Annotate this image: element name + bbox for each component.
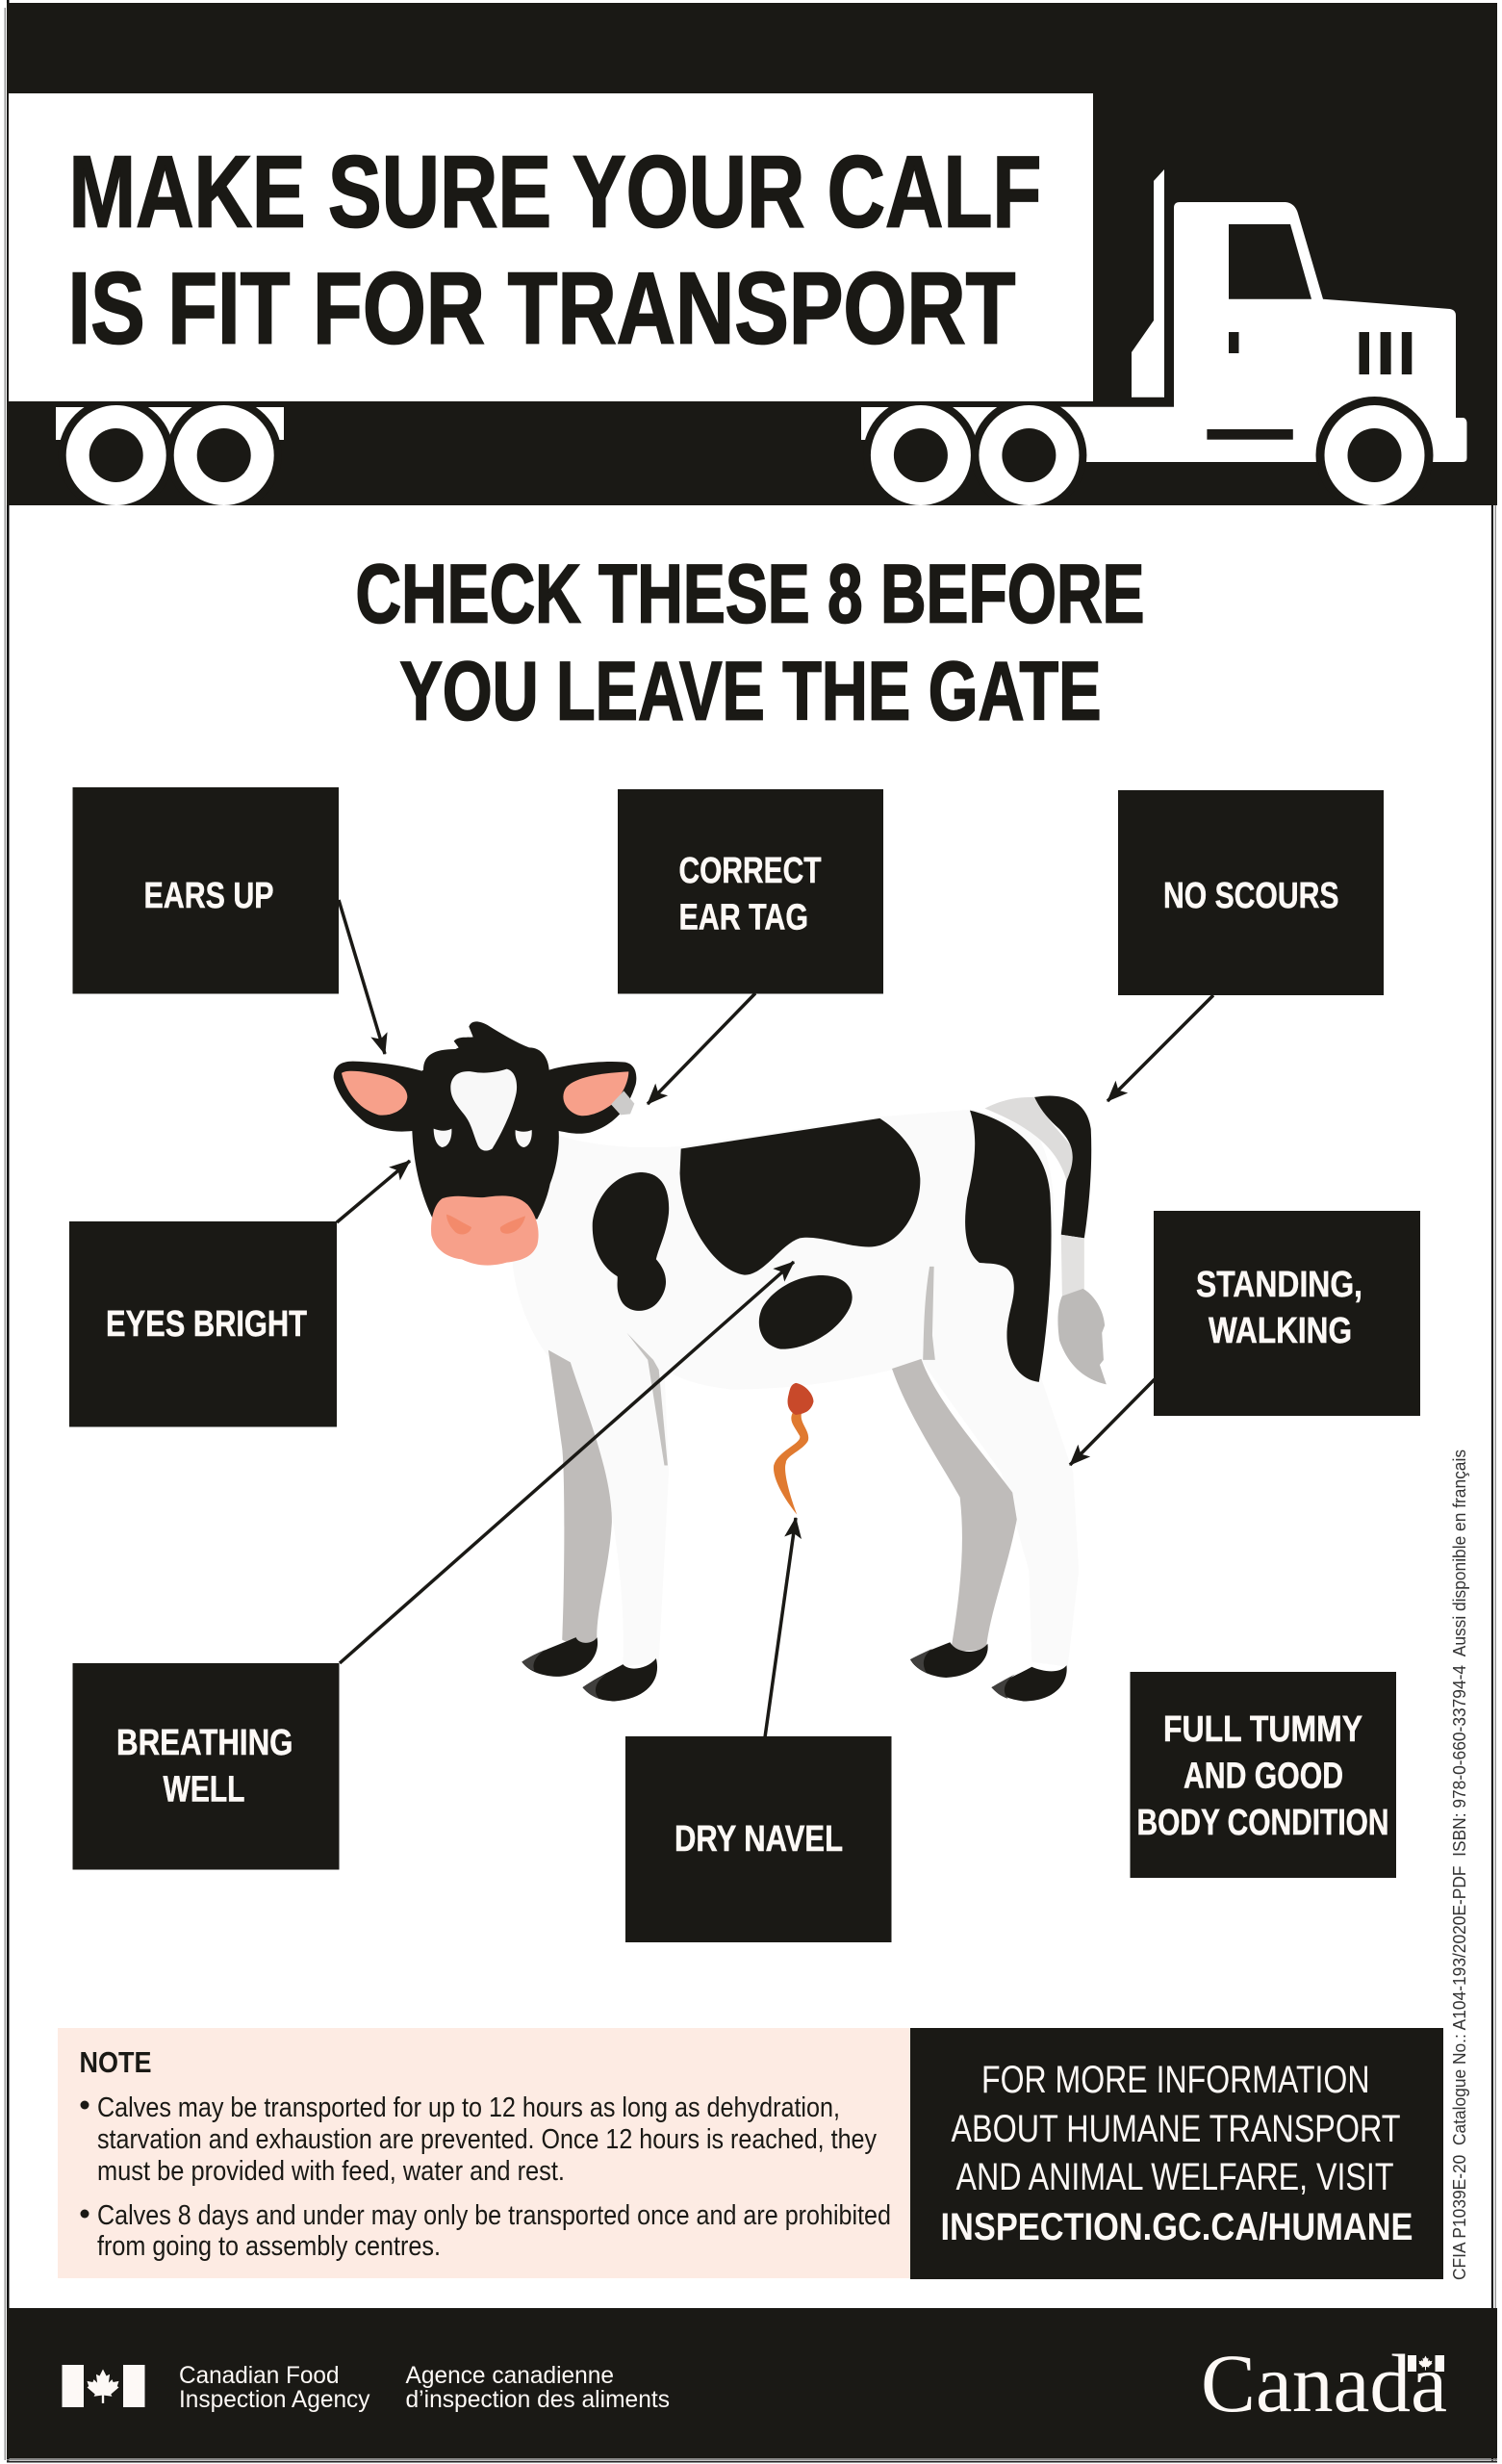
calf body (513, 1095, 1107, 1701)
panel: more information: FOR MORE INFORMATION (981, 2059, 1370, 2101)
arrow: breathing well (340, 1262, 794, 1663)
arrow: standing walking (1070, 1379, 1155, 1465)
panel: more information (910, 2028, 1443, 2279)
panel: more information: AND ANIMAL WELFARE, VISIT (956, 2156, 1393, 2198)
note bullet one (81, 2092, 877, 2187)
footer band (7, 2308, 1497, 2462)
note bullet one: must be provided with feed, water and rest. (97, 2156, 565, 2187)
icon: canadian flag (62, 2365, 144, 2407)
box: standing walking: STANDING, (1196, 1265, 1362, 1305)
catalogue side text: CFIA P1039E-20 Catalogue No.: A104-193/2020E-PDF ISBN: 978-0-660-33794-4 Aussi disponible en français (1450, 1450, 1469, 2280)
agency name english: Inspection Agency (179, 2386, 370, 2413)
arrow: dry navel (765, 1518, 796, 1737)
box: ears up: EARS UP (144, 876, 273, 916)
box: eyes bright (69, 1221, 337, 1426)
truck trailer panel (9, 93, 1093, 401)
box: full tummy: AND GOOD (1184, 1756, 1343, 1796)
arrow: ears up (339, 900, 385, 1054)
truck wheels (861, 397, 1434, 514)
agency name english (179, 2362, 370, 2413)
box: breathing well: BREATHING (116, 1723, 293, 1763)
agency name french: Agence canadienne (406, 2362, 614, 2389)
subheading: YOU LEAVE THE GATE (400, 645, 1101, 737)
agency name french: d’inspection des aliments (406, 2386, 670, 2413)
calf illustration (334, 1021, 1107, 1701)
box: full tummy: FULL TUMMY (1163, 1709, 1362, 1750)
box: standing walking: WALKING (1209, 1311, 1352, 1351)
agency name english: Canadian Food (179, 2362, 339, 2389)
box: correct ear tag: EAR TAG (679, 897, 808, 937)
agency name french (406, 2362, 670, 2413)
box: full tummy (1130, 1672, 1396, 1878)
box: full tummy: BODY CONDITION (1137, 1803, 1389, 1843)
box: dry navel: DRY NAVEL (675, 1819, 843, 1860)
box: standing walking (1154, 1211, 1420, 1416)
arrow: eyes bright (337, 1161, 410, 1222)
panel: more information: INSPECTION.GC.CA/HUMANE (941, 2206, 1413, 2248)
note heading: NOTE (79, 2045, 152, 2079)
calf head (334, 1021, 636, 1266)
note bullet two: Calves 8 days and under may only be transported once and are prohibited (97, 2200, 891, 2231)
subheading: CHECK THESE 8 BEFORE (356, 549, 1145, 641)
box: eyes bright: EYES BRIGHT (106, 1304, 307, 1345)
note bullet one: starvation and exhaustion are prevented. Once 12 hours is reached, they (97, 2124, 877, 2155)
box: dry navel (625, 1736, 891, 1942)
trailer wheels (56, 405, 284, 505)
box: no scours (1118, 790, 1384, 995)
title (67, 135, 1041, 366)
hooves (522, 1637, 598, 1677)
box: breathing well (73, 1663, 339, 1869)
title: IS FIT FOR TRANSPORT (67, 252, 1016, 366)
box: ears up (73, 787, 339, 993)
truck cab (1049, 169, 1466, 462)
box: correct ear tag: CORRECT (679, 851, 822, 891)
box: correct ear tag (618, 789, 883, 993)
note bullet two: from going to assembly centres. (97, 2231, 441, 2262)
panel: note (58, 2028, 910, 2278)
box: no scours: NO SCOURS (1163, 876, 1339, 916)
arrow: correct ear tag (648, 993, 755, 1104)
navel (774, 1413, 808, 1515)
box: breathing well: WELL (164, 1769, 244, 1810)
canada wordmark: Canada (1201, 2337, 1447, 2429)
panel: more information: ABOUT HUMANE TRANSPORT (951, 2108, 1401, 2150)
note bullet two (81, 2200, 891, 2262)
arrow: no scours (1107, 995, 1213, 1101)
subheading (356, 549, 1145, 737)
title: MAKE SURE YOUR CALF (69, 135, 1041, 248)
header band with truck (7, 3, 1497, 514)
note bullet one: Calves may be transported for up to 12 hours as long as dehydration, (97, 2092, 840, 2123)
